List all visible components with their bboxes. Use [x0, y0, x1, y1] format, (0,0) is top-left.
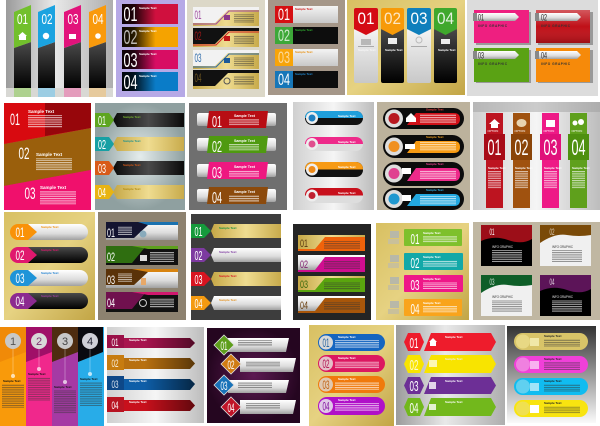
- tile 04: [388, 299, 462, 318]
- pill 02: Sample Text: [426, 135, 443, 139]
- ribbon 02: OPTION: [514, 129, 525, 133]
- row 04: Sample Text: [445, 400, 462, 404]
- row 01: [95, 113, 184, 128]
- row 04: [95, 185, 184, 200]
- card 04 orange: INFO GRAPHIC: [541, 62, 571, 66]
- row 02: Sample Text: [295, 28, 312, 32]
- row 02: [95, 137, 184, 152]
- card 02: 02: [384, 9, 401, 28]
- panel: black pills with colour fronts: [377, 102, 470, 210]
- ribbon 04: 04: [572, 135, 586, 160]
- row 03: [191, 272, 281, 287]
- panel: angled banners on taupe: [98, 212, 186, 320]
- card 01: Sample Text: [358, 48, 375, 52]
- card 03 green: 03: [478, 50, 484, 60]
- pill 04: 04: [322, 400, 330, 414]
- tile 02: Sample Text: [423, 255, 440, 259]
- panel: four info graphic cards: [467, 0, 598, 96]
- banner 04: [107, 397, 195, 412]
- row 03: [95, 161, 184, 176]
- card 04: 04: [550, 277, 554, 287]
- ribbon 02: Sample Text: [515, 166, 532, 170]
- panel: colour bands over silver tubes: [189, 103, 287, 210]
- banner 04: 04: [107, 296, 115, 310]
- card 03: [481, 275, 532, 316]
- card 03 green: [473, 48, 531, 83]
- bar 03: [122, 50, 178, 72]
- row 02: 02: [410, 357, 418, 374]
- panel: number tabs with black and white bars: [268, 0, 345, 95]
- row 02: 02: [278, 26, 290, 45]
- card 01: INFO GRAPHIC: [492, 245, 514, 249]
- column 04 cyan: 4: [87, 336, 93, 348]
- band 02 brown: [4, 128, 91, 186]
- pill 04: Sample Text: [338, 191, 355, 195]
- tile 03: 03: [410, 277, 420, 294]
- row 03: 03: [278, 48, 290, 67]
- pill 02: [10, 247, 88, 263]
- row 03: 03: [212, 165, 222, 182]
- card 04 orange: [535, 48, 593, 83]
- band 02 brown: 02: [18, 144, 30, 163]
- ribbon 04: Sample Text: [572, 166, 589, 170]
- pill 04: Sample Text: [426, 188, 443, 192]
- card 04: Sample Text: [438, 48, 455, 52]
- card 02 red: INFO GRAPHIC: [541, 24, 571, 28]
- card 01 pink: 01: [478, 12, 484, 22]
- bar 01: 01: [124, 4, 138, 26]
- column 03 pink: 03: [68, 11, 78, 28]
- ribbon 01: Sample Text: [488, 166, 505, 170]
- row 02: [197, 136, 276, 156]
- bar 02: 02: [124, 27, 138, 49]
- card 02: INFO GRAPHIC: [552, 245, 574, 249]
- row 03: Sample Text: [219, 274, 236, 278]
- pill 04: Sample Text: [338, 398, 355, 402]
- pill 01: Sample Text: [338, 114, 355, 118]
- panel: notched bars on dark grey: [191, 214, 281, 320]
- tile 01: [388, 229, 462, 248]
- row 04: Sample Text: [234, 190, 256, 194]
- tile 01: 01: [410, 231, 420, 248]
- column 03 purple: [52, 327, 78, 426]
- pill 01: 01: [322, 336, 330, 350]
- row 02: [404, 355, 496, 374]
- band 01 red: [4, 103, 91, 144]
- card 01: 01: [358, 9, 374, 28]
- row 04: Sample Text: [123, 187, 140, 191]
- card 01: [481, 225, 532, 266]
- row 02: [275, 26, 338, 45]
- pill 03: Sample Text: [426, 162, 443, 166]
- column 01 green: 01: [17, 11, 28, 28]
- pill 02: [318, 355, 385, 372]
- banner 01: 01: [194, 8, 202, 22]
- row 04: [404, 398, 496, 417]
- banner 03: 03: [112, 379, 118, 391]
- column 02 magenta: [26, 327, 52, 426]
- row 04: [197, 187, 276, 207]
- row 01: 01: [212, 114, 222, 131]
- row 01: Sample Text: [219, 226, 236, 230]
- pill 01: Sample Text: [426, 108, 443, 112]
- banner 03: 03: [107, 273, 115, 287]
- row 01: 01: [98, 113, 106, 128]
- banner 03: Sample Text: [129, 379, 146, 383]
- row 04: 04: [194, 296, 202, 311]
- row 04: 04: [98, 185, 106, 200]
- bar 03: 03: [124, 50, 138, 72]
- pill 03: Sample Text: [338, 165, 355, 169]
- row 02: Sample Text: [445, 357, 462, 361]
- pill 01: 01: [16, 224, 25, 240]
- panel: colour pills on gold: [309, 325, 394, 426]
- row 02: [191, 248, 281, 263]
- card 04: [434, 8, 457, 83]
- card 02: [381, 8, 404, 83]
- ribbon 04: OPTION: [572, 129, 582, 133]
- row 04: 04: [228, 401, 235, 415]
- bar 02: Sample Text: [139, 29, 156, 33]
- pill 04 yellow: Sample Text: [544, 401, 561, 405]
- row 03: [275, 48, 338, 67]
- ribbon 02: 02: [514, 135, 528, 160]
- row 03: 03: [98, 161, 106, 176]
- panel: slanted vertical columns: [6, 0, 113, 97]
- row 02: 02: [98, 137, 106, 152]
- row 02: Sample Text: [219, 250, 236, 254]
- banner 02: [107, 355, 195, 370]
- row 04: 04: [278, 70, 290, 89]
- row 01: [191, 224, 281, 239]
- row 03: Sample Text: [234, 165, 256, 169]
- banner 01: Sample Text: [129, 338, 146, 342]
- card 01: 01: [490, 227, 494, 237]
- pill 01 gold: Sample Text: [544, 334, 561, 338]
- card 02: 02: [550, 227, 554, 237]
- card 03: 03: [410, 9, 428, 28]
- row 04: 04: [300, 300, 308, 312]
- column 01 orange: 1: [10, 336, 16, 348]
- band 01 red: Sample Text: [28, 109, 55, 114]
- row 02: 02: [300, 259, 308, 271]
- bar 02: [122, 27, 178, 49]
- tile 02: 02: [410, 255, 420, 272]
- panel: icon and colour tiles on gold: [376, 223, 469, 320]
- pill 02: Sample Text: [41, 248, 58, 252]
- pill 03: [318, 376, 385, 393]
- bar 01: [122, 4, 178, 26]
- pill 02: Sample Text: [338, 140, 355, 144]
- row 01: Sample Text: [445, 335, 462, 339]
- band 02 brown: Sample Text: [36, 152, 63, 157]
- row 04: 04: [212, 190, 222, 207]
- row 01: Sample Text: [295, 7, 312, 11]
- pill 01: Sample Text: [338, 335, 355, 339]
- banner 01: 01: [112, 337, 118, 349]
- card 04: INFO GRAPHIC: [552, 295, 574, 299]
- column 03 purple: Sample Text: [54, 385, 71, 389]
- pill 01: Sample Text: [41, 225, 58, 229]
- band 03 pink: [4, 170, 91, 210]
- panel: arrow tabs with black and gold bars: [95, 103, 185, 210]
- pill 03: Sample Text: [41, 271, 58, 275]
- panel: slanted stacked bands: [4, 103, 91, 210]
- tile 01: Sample Text: [423, 231, 440, 235]
- row 02: 02: [194, 248, 202, 263]
- panel: gold banners with angled tops: [187, 0, 265, 97]
- row 01: 01: [220, 339, 228, 353]
- tile 03: Sample Text: [423, 277, 440, 281]
- pill 02: Sample Text: [338, 356, 355, 360]
- ribbon 01: [484, 113, 505, 208]
- panel: half colour pills on silver: [293, 102, 374, 210]
- pill 03 cyan: Sample Text: [544, 379, 561, 383]
- pill 02: 02: [322, 357, 330, 371]
- card 02: Sample Text: [385, 48, 402, 52]
- column 02 magenta: Sample Text: [28, 372, 45, 376]
- column 01 orange: [0, 327, 26, 426]
- card 04: [540, 275, 591, 316]
- row 01: Sample Text: [234, 114, 256, 118]
- card 02: [540, 225, 591, 266]
- banner 02: Sample Text: [129, 358, 146, 362]
- pill 03: Sample Text: [338, 377, 355, 381]
- row 04: Sample Text: [295, 72, 312, 76]
- card 01: [354, 8, 378, 83]
- panel: metallic tabs over colour bars: [293, 224, 371, 320]
- pill 03: [10, 270, 88, 286]
- pill 04: [318, 397, 385, 415]
- column 04 cyan: [78, 327, 104, 426]
- row 01: [404, 333, 496, 352]
- row 03: Sample Text: [445, 379, 462, 383]
- row 02: 02: [228, 358, 235, 372]
- pill 04: Sample Text: [41, 294, 58, 298]
- row 03: [404, 377, 496, 395]
- row 03: 03: [194, 272, 202, 287]
- row 03: Sample Text: [123, 163, 140, 167]
- card 04 orange: 04: [541, 50, 547, 60]
- pill 02 magenta: Sample Text: [544, 357, 561, 361]
- panel: vertical ribbons with option labels: [473, 102, 600, 210]
- pill 04: [10, 293, 88, 309]
- row 01: 01: [278, 5, 290, 24]
- banner 03: 03: [194, 51, 202, 65]
- tile 04: 04: [410, 301, 420, 318]
- row 04: 04: [410, 400, 418, 417]
- banner 01: [107, 335, 195, 349]
- tile 02: [388, 253, 463, 272]
- ribbon 01: OPTION: [488, 129, 498, 133]
- pill 01: [318, 334, 385, 351]
- row 01: 01: [410, 335, 418, 352]
- banner 02: 02: [112, 358, 118, 370]
- row 04: Sample Text: [219, 298, 236, 302]
- banner 04: Sample Text: [129, 400, 146, 404]
- ribbon 03: Sample Text: [544, 166, 561, 170]
- row 01: 01: [300, 238, 308, 250]
- card 01 pink: [473, 10, 531, 45]
- banner 04: 04: [112, 400, 118, 412]
- panel: hexagon tabs and arrow bars: [396, 325, 505, 425]
- bar 04: 04: [124, 72, 138, 94]
- row 01: [197, 111, 276, 131]
- card 03: 03: [490, 277, 494, 287]
- bar 01: Sample Text: [139, 6, 156, 10]
- pill 03: 03: [16, 270, 25, 286]
- card 03 green: INFO GRAPHIC: [478, 62, 508, 66]
- card 02 red: [535, 10, 593, 45]
- ribbon 04: [568, 113, 589, 208]
- band 01 red: 01: [10, 110, 20, 129]
- card 01 pink: INFO GRAPHIC: [478, 24, 508, 28]
- row 01: [275, 5, 338, 24]
- ribbon 03: 03: [544, 135, 558, 160]
- column 02 blue: 02: [42, 11, 52, 28]
- card 02 red: 02: [541, 12, 547, 22]
- panel: rounded pills on dark gradient: [507, 326, 596, 423]
- tile 04: Sample Text: [423, 301, 440, 305]
- bar 03: Sample Text: [139, 52, 156, 56]
- panel: four vertical columns with circles: [0, 327, 104, 426]
- band 03 pink: Sample Text: [40, 185, 67, 190]
- pill 01: [10, 224, 88, 240]
- ribbon 01: 01: [488, 135, 502, 160]
- ribbon 03: [540, 113, 561, 208]
- card 03: INFO GRAPHIC: [492, 295, 514, 299]
- panel: four tall cards with arrow heads: [347, 0, 465, 95]
- row 03: 03: [220, 379, 228, 393]
- banner 04: 04: [194, 71, 202, 85]
- banner 02: 02: [194, 29, 202, 43]
- tile 03: [388, 275, 463, 294]
- row 01: 01: [194, 224, 202, 239]
- row 02: Sample Text: [234, 139, 256, 143]
- row 04: [275, 70, 338, 89]
- row 03: Sample Text: [295, 50, 312, 54]
- band 03 pink: 03: [24, 184, 36, 203]
- bar 04: Sample Text: [139, 74, 156, 78]
- banner 02: 02: [107, 250, 115, 264]
- row 02: Sample Text: [123, 139, 140, 143]
- panel: arrow banners on silver: [107, 327, 204, 423]
- panel: pills with arrow tabs on gold: [4, 212, 95, 320]
- panel: diamonds and slanted bars on plum: [207, 328, 300, 423]
- ribbon 02: [511, 113, 532, 208]
- bar 04: [122, 72, 178, 94]
- panel: wave cards on taupe: [473, 222, 600, 320]
- panel: fading colour bars on lilac: [116, 0, 185, 97]
- pill 02: 02: [16, 247, 25, 263]
- banner 01: 01: [107, 226, 115, 240]
- column 02 magenta: 2: [36, 336, 42, 348]
- card 04: 04: [437, 9, 454, 28]
- banner 03: [107, 376, 195, 391]
- row 03: 03: [300, 279, 308, 291]
- column 01 orange: Sample Text: [3, 379, 20, 383]
- row 02: 02: [212, 139, 222, 156]
- row 03: [197, 162, 276, 182]
- pill 03: 03: [322, 378, 330, 392]
- row 04: [191, 296, 281, 311]
- ribbon 03: OPTION: [544, 129, 554, 133]
- column 04 cyan: Sample Text: [80, 377, 97, 381]
- column 04 orange: 04: [92, 11, 104, 28]
- pill 04: 04: [16, 293, 25, 309]
- row 01: Sample Text: [123, 115, 140, 119]
- row 03: 03: [410, 378, 418, 395]
- column 03 purple: 3: [62, 336, 68, 348]
